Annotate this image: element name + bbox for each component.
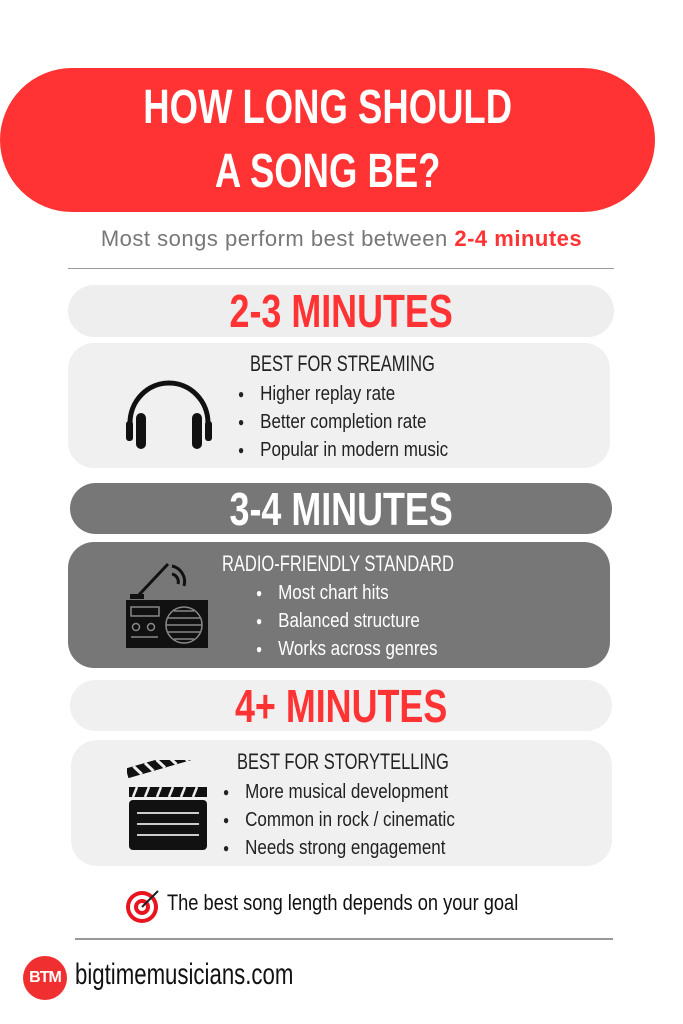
heading: BEST FOR STREAMING — [250, 351, 435, 376]
bullets: Needs strong engagement — [245, 837, 445, 859]
bullets: Higher replay rate — [260, 383, 395, 405]
panel: streaming — [68, 343, 610, 468]
bullets: Popular in modern music — [260, 439, 448, 461]
bullets — [224, 781, 455, 859]
header: 3-4 minutes: 3-4 MINUTES — [229, 483, 453, 535]
panel: radio — [68, 542, 610, 668]
icon: clapperboard — [127, 760, 207, 850]
heading: BEST FOR STORYTELLING — [237, 749, 449, 774]
icon: headphones — [126, 380, 212, 449]
title banner: HOW LONG SHOULD — [143, 81, 512, 134]
panel: storytelling — [71, 740, 612, 866]
bullets: Most chart hits — [278, 582, 389, 604]
bullets: Better completion rate — [260, 411, 426, 433]
logo: BTM — [29, 969, 61, 986]
header: 4+ minutes: 4+ MINUTES — [235, 680, 447, 732]
header: 2-3 minutes — [68, 285, 614, 337]
logo — [23, 956, 293, 1000]
header: 3-4 minutes — [70, 483, 612, 534]
header: 4+ minutes — [70, 680, 612, 731]
heading: RADIO-FRIENDLY STANDARD — [222, 551, 454, 576]
icon: target — [126, 890, 159, 923]
bullets: More musical development — [245, 781, 448, 803]
bullets — [238, 383, 448, 461]
footer note with target icon — [126, 890, 518, 923]
header: 2-3 minutes: 2-3 MINUTES — [229, 285, 453, 337]
logo: bigtimemusicians.com — [75, 958, 293, 991]
bullets: Works across genres — [278, 638, 437, 660]
bullets — [256, 582, 437, 660]
icon: radio — [126, 563, 208, 648]
title banner — [0, 68, 655, 212]
bullets: Common in rock / cinematic — [245, 809, 455, 831]
subtitle: Most songs perform best between 2-4 minutes — [101, 226, 582, 251]
bullets: Balanced structure — [278, 610, 420, 632]
title banner: A SONG BE? — [215, 145, 440, 198]
footer note with target icon: The best song length depends on your goal — [167, 890, 518, 915]
